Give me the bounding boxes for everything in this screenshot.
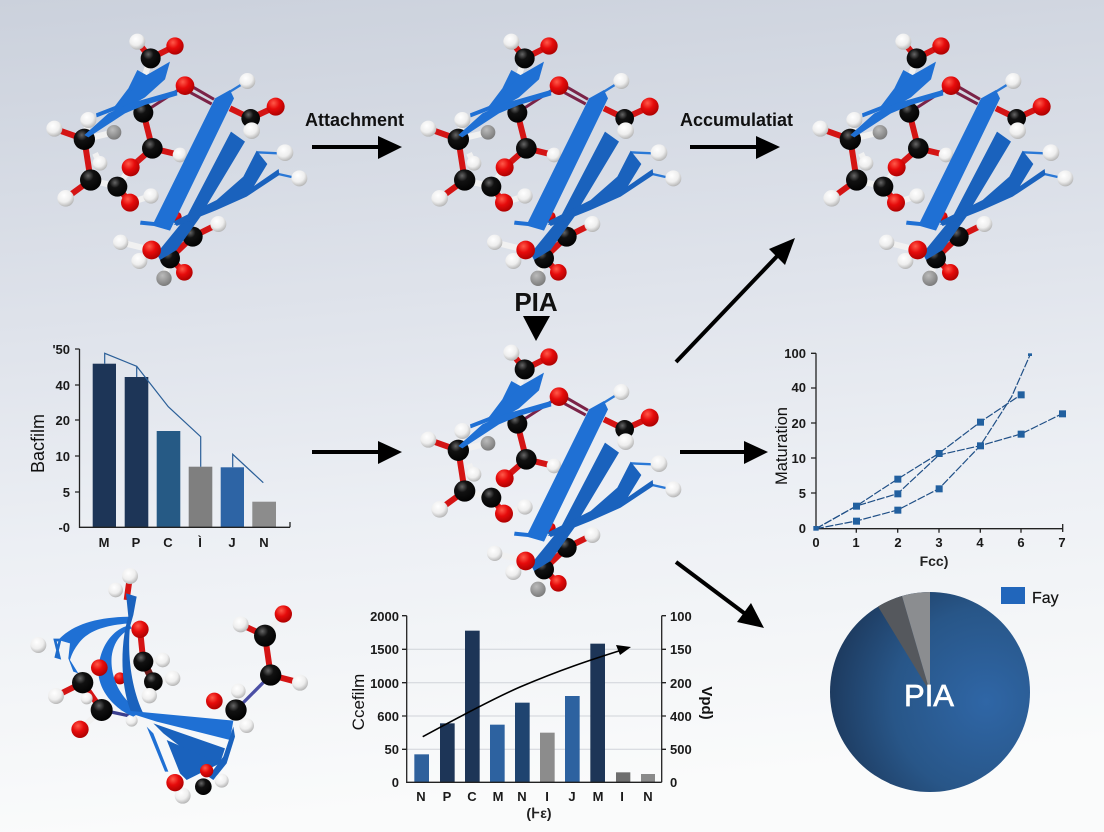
right axis title: Vpd): [698, 686, 715, 720]
dark grey slice: [878, 596, 930, 692]
line chart: Maturation: [773, 346, 1066, 569]
right y axis labels: 500: [670, 742, 692, 757]
legend: Fay: [1032, 590, 1059, 607]
label: Accumulatiat: Accumulatiat: [680, 110, 793, 130]
x axis title: (Ͱε): [526, 805, 552, 821]
left y axis labels: 1000: [370, 676, 399, 691]
x axis labels: M: [493, 789, 503, 804]
bars: [414, 631, 655, 782]
x axis labels: I: [620, 789, 624, 804]
axis title: Maturation: [773, 407, 791, 485]
arrow: biofilm chart to central molecule: [312, 441, 402, 464]
bar chart: Bacfilm: [28, 342, 290, 550]
x axis labels: 6: [1017, 535, 1025, 550]
y axis labels: 10: [56, 449, 70, 464]
y axis labels: 20: [56, 413, 70, 428]
y axis labels: -0: [58, 520, 70, 535]
label: PIA: PIA: [514, 287, 558, 317]
x axis labels: 4: [976, 535, 984, 550]
bars: [93, 364, 276, 527]
main slice: [830, 592, 1030, 792]
molecule: central PIA: [420, 345, 681, 597]
x axis labels: 0: [812, 535, 820, 550]
right y axis labels: 0: [670, 775, 677, 790]
right y axis labels: 200: [670, 676, 692, 691]
y axis labels: 5: [63, 485, 70, 500]
x axis labels: 7: [1058, 535, 1066, 550]
x axis labels: N: [416, 789, 426, 804]
pie label: PIA: [904, 678, 954, 713]
legend: [1001, 587, 1059, 607]
light grey slice: [902, 592, 930, 692]
x axis labels: N: [643, 789, 653, 804]
arrow: diagonal down to pie chart: [676, 562, 764, 628]
left y axis labels: 2000: [370, 609, 399, 624]
x axis labels: Ì: [197, 535, 202, 550]
trend arrow: [423, 645, 631, 737]
molecule: accumulation stage: [812, 34, 1073, 286]
x axis labels: M: [593, 789, 603, 804]
x axis labels: N: [259, 535, 269, 550]
molecule: attachment stage: [46, 34, 307, 286]
x axis labels: 1: [852, 535, 860, 550]
x axis labels: C: [163, 535, 173, 550]
left y axis labels: 1500: [370, 642, 399, 657]
x axis labels: P: [132, 535, 141, 550]
x axis labels: J: [568, 789, 576, 804]
x axis labels: [99, 535, 269, 550]
series lines: [813, 353, 1066, 531]
x axis labels: J: [228, 535, 236, 550]
x axis labels: [812, 535, 1066, 550]
y axis labels: 5: [799, 486, 806, 501]
molecule: intermediate stage: [420, 34, 681, 286]
x axis labels: [416, 789, 653, 804]
left y axis labels: 50: [385, 742, 399, 757]
right y axis labels: [670, 609, 692, 790]
left y axis labels: 600: [377, 709, 399, 724]
arrow: central molecule to maturation chart: [680, 441, 768, 464]
x axis labels: C: [467, 789, 477, 804]
left y axis labels: 0: [392, 775, 399, 790]
y axis labels: 100: [784, 346, 806, 361]
y axis labels: [784, 346, 806, 536]
x axis labels: M: [99, 535, 109, 550]
right y axis labels: 150: [670, 642, 692, 657]
arrow: diagonal up to accumulation: [676, 238, 795, 362]
y axis labels: 10: [792, 451, 806, 466]
arrow: attachment to molecule: [312, 136, 402, 159]
y axis labels: 0: [799, 521, 806, 536]
arrow: to accumulation: [690, 136, 780, 159]
right y axis labels: 100: [670, 609, 692, 624]
y axis labels: [52, 342, 70, 535]
x axis labels: P: [443, 789, 452, 804]
bar chart: Ccefilm: [349, 609, 715, 821]
right y axis labels: 400: [670, 709, 692, 724]
left y axis labels: [370, 609, 399, 790]
gridlines and axes: [407, 649, 661, 749]
axis title: Bacfilm: [28, 414, 48, 473]
x axis title: Fcc): [920, 553, 948, 569]
trend line: [105, 353, 263, 483]
pie chart: [830, 587, 1059, 792]
axis title: Ccefilm: [349, 674, 368, 730]
molecule: bottom-left folded protein: [30, 568, 308, 804]
x axis labels: 2: [894, 535, 902, 550]
x axis labels: N: [517, 789, 527, 804]
x axis labels: I: [545, 789, 549, 804]
y axis labels: 40: [792, 380, 806, 395]
y axis labels: 40: [56, 378, 70, 393]
y axis labels: '50: [52, 342, 70, 357]
arrow: PIA down: [523, 316, 550, 341]
x axis labels: 3: [935, 535, 943, 550]
label: Attachment: Attachment: [305, 110, 404, 130]
y axis labels: 20: [792, 416, 806, 431]
